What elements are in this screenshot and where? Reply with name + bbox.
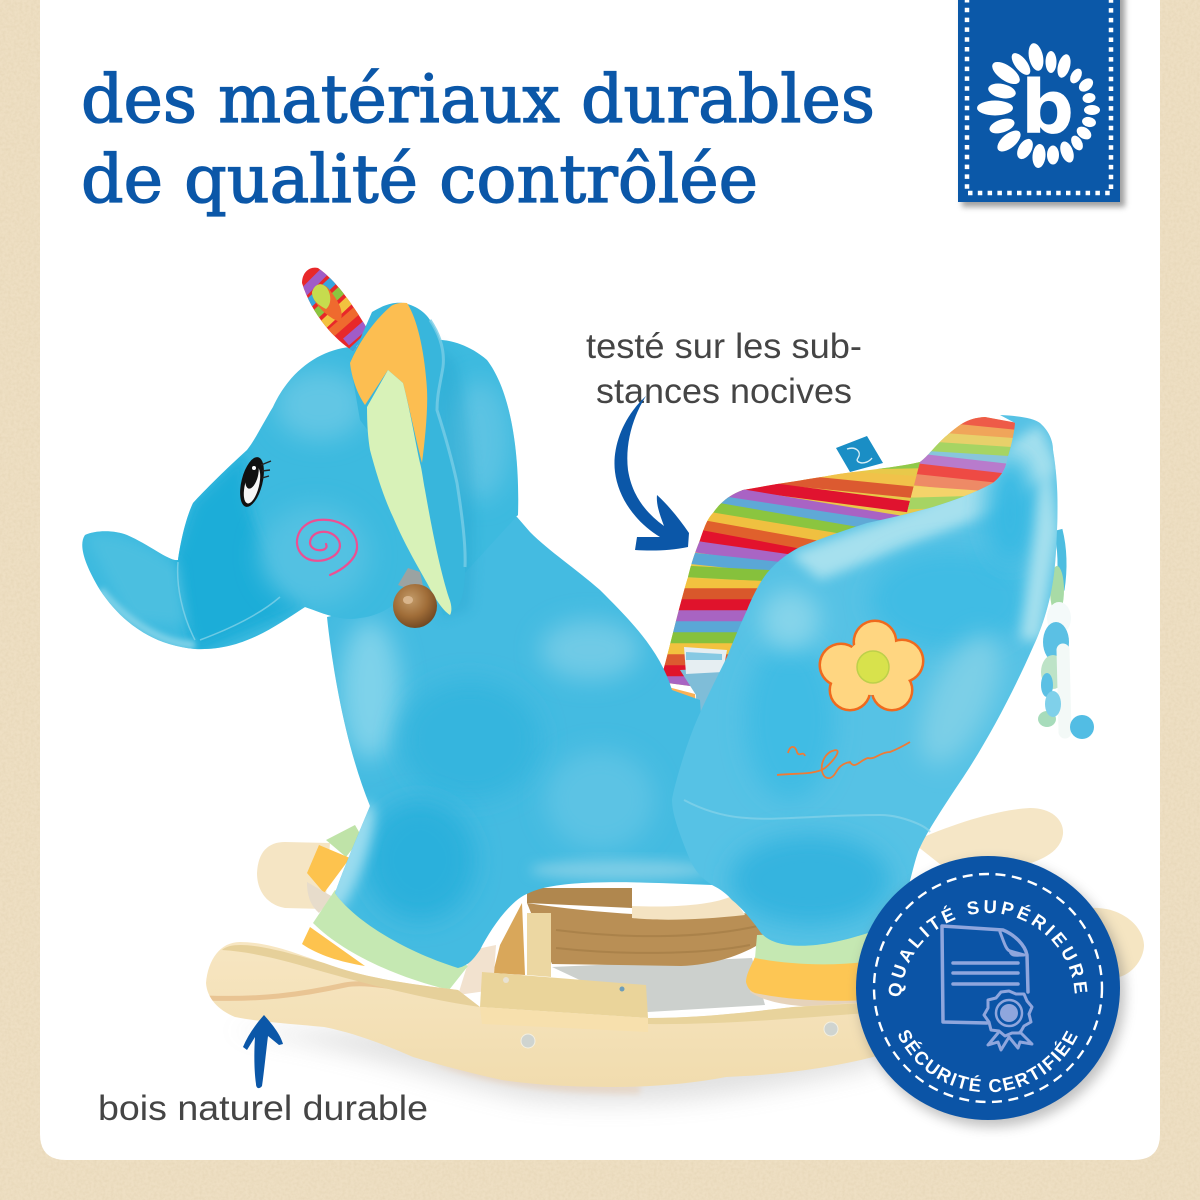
arrow to rocker [243,1015,283,1088]
logo letter b: b [1021,65,1074,151]
label squiggle [847,448,872,463]
arrow to seat [614,396,689,551]
title: de qualité contrôlée [81,141,758,218]
annotation: harmful substances second line: stances nocives [596,372,852,411]
near rocker right end [1060,908,1144,978]
title [81,61,875,218]
seat harness buckle and pad [668,647,727,764]
plush body shading [316,620,710,921]
far rocker right end [912,808,1063,880]
certificate seal [984,991,1032,1050]
floor seen between rockers [552,958,765,1012]
rainbow stripes wing interior [908,417,1015,510]
front right leg cuffs [746,930,870,1008]
trunk seam [178,562,280,640]
eye [236,455,271,509]
icon: certificate [942,926,1032,1050]
logo flower petals [977,42,1100,169]
footrest block [480,972,648,1018]
near rocker and footrest [206,942,900,1087]
cheek spiral [297,520,357,575]
badge lower text: SÉCURITÉ CERTIFIÉE [898,1030,1078,1092]
far rocker rail [527,903,765,966]
rainbow ear tag [302,268,366,351]
wooden uprights [493,903,525,975]
ear tag stripes [303,270,366,351]
embroidered flower [818,620,924,712]
rocker top rim [222,945,480,1007]
annotation: harmful substances: testé sur les sub- [586,327,862,366]
rocker wood grain [206,984,400,998]
embroidered signature [777,742,910,778]
wooden cross block [527,888,632,908]
rocking horse base: far rocker [257,808,1144,1012]
neck bead [393,568,437,628]
brand label on seat [836,436,883,472]
rear leg cuffs [307,825,362,913]
seat side wing [672,415,1058,946]
badge upper text: QUALITÉ SUPÉRIEURE [888,900,1088,996]
wing plush shading [730,425,1058,925]
annotation: natural wood: bois naturel durable [98,1089,428,1128]
plush elephant body [316,517,712,968]
floor shadow [225,1030,880,1103]
rainbow stripes backrest [664,462,920,686]
far rocker left stub [257,842,330,909]
ear inner yellow [350,303,427,463]
brand logo tag [958,0,1125,207]
elephant head [82,260,518,655]
title: des matériaux durables [81,61,875,138]
head shading [85,370,510,655]
elephant ear [350,303,474,620]
seat: rainbow backrest [650,417,1030,690]
screws [521,1034,535,1048]
tail braid [1038,530,1094,739]
ear inner green [367,370,451,615]
quality seal badge [852,855,1132,1134]
seam on wing [684,800,930,832]
front left leg cuffs [302,890,468,990]
